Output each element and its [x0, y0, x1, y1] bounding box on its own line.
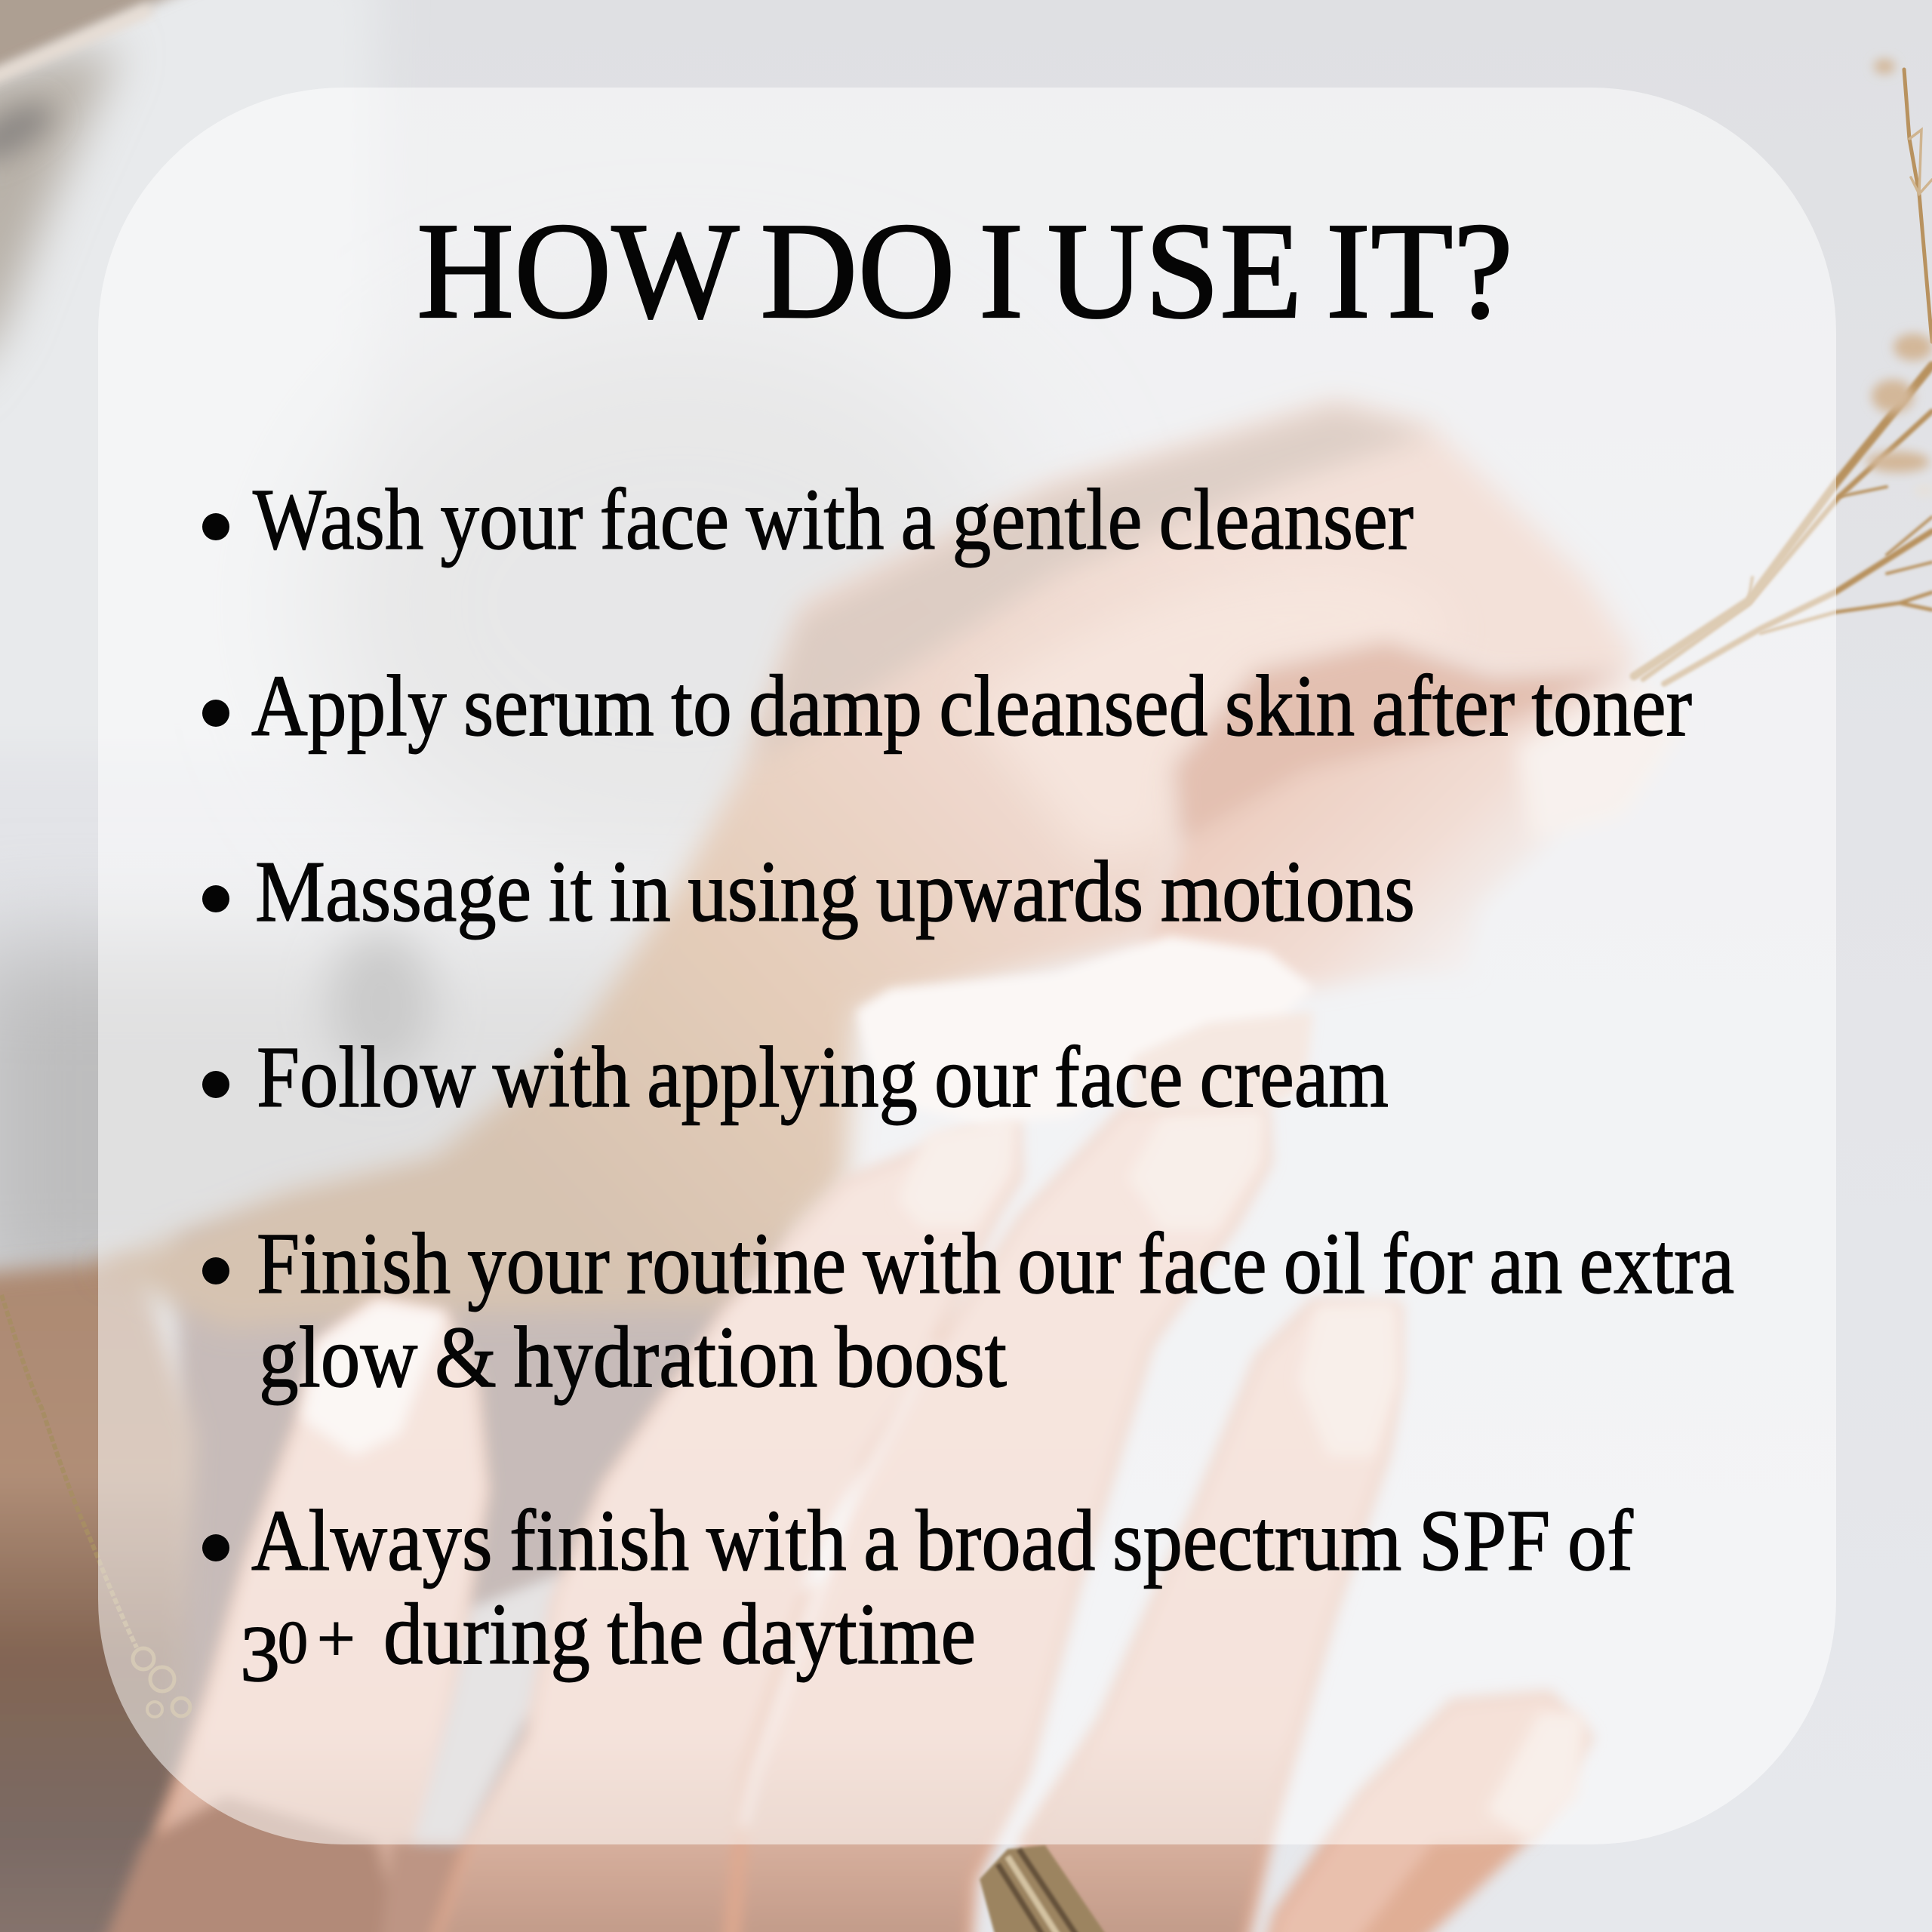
step 6: during the daytime — [383, 1586, 976, 1683]
step 6: Always finish with a broad spectrum SPF of — [251, 1493, 1633, 1589]
step 4: Follow with applying our face cream — [257, 1029, 1389, 1126]
bracelet chain — [2, 1295, 190, 1717]
step 2: Apply serum to damp cleansed skin after toner — [251, 658, 1692, 755]
dried flower buds — [1866, 59, 1932, 495]
step 5 — [202, 1216, 1734, 1406]
step 6: 0 — [278, 1610, 308, 1676]
step 5: glow & hydration boost — [259, 1309, 1007, 1406]
heading: HOW DO I USE IT? — [417, 194, 1513, 347]
arm and shadow behind fingers — [0, 1132, 830, 1932]
lower hand — [91, 1109, 1589, 1932]
step 6: + — [317, 1601, 355, 1676]
step 6 — [202, 1493, 1633, 1698]
dried flower stems — [1634, 69, 1932, 684]
nails — [302, 1109, 1585, 1841]
step 6: 3 — [240, 1610, 280, 1698]
step 3: Massage it in using upwards motions — [255, 844, 1415, 940]
step 5: Finish your routine with our face oil for an extra — [257, 1216, 1734, 1312]
back of hand — [97, 401, 1637, 1328]
fold between the fingers — [1140, 641, 1683, 989]
gold ring — [980, 1845, 1109, 1932]
step 1: Wash your face with a gentle cleanser — [253, 472, 1414, 568]
sleeve and fabric, top left — [0, 0, 1041, 1321]
cream on the hand — [857, 936, 1313, 1124]
